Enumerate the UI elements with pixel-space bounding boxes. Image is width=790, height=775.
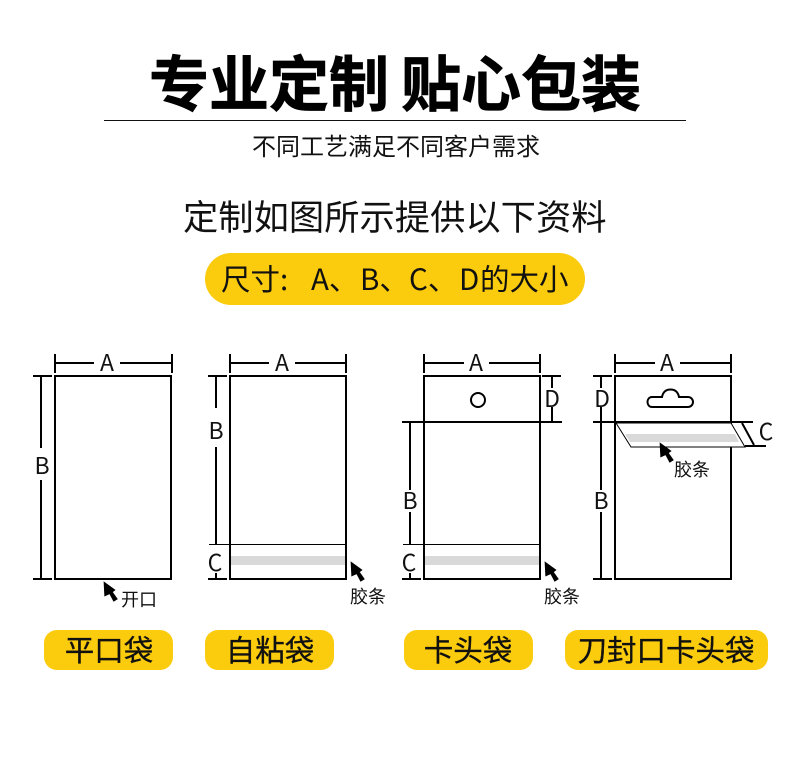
dimension B [33, 376, 52, 579]
dimension A: A [100, 344, 114, 378]
dimension B: B [208, 412, 224, 446]
dimension A [424, 344, 540, 378]
dimension A [615, 344, 731, 378]
callout: sizes pill: C、 [409, 257, 457, 299]
title: 专业定制 [149, 37, 389, 124]
dimension B [208, 376, 227, 545]
arrow: opening [104, 582, 117, 601]
tag: header-card bag [404, 628, 533, 670]
header fold line [402, 421, 562, 423]
callout: sizes pill: B、 [360, 257, 409, 299]
dimension B: B [402, 482, 418, 516]
label: adhesive strip: 胶条 [350, 583, 386, 609]
tag: flat-mouth bag [44, 628, 173, 670]
tag: header-card bag: 卡头袋 [424, 628, 512, 670]
label: opening: 开口 [121, 586, 157, 612]
dimension D: D [544, 380, 560, 414]
tag: self-adhesive bag: 自粘袋 [226, 628, 314, 670]
hang hole [471, 393, 485, 407]
tag: flat-mouth bag: 平口袋 [65, 628, 153, 670]
title underline [104, 120, 686, 121]
dimension C: C [208, 544, 222, 578]
dimension B: B [593, 482, 609, 516]
panel: header-card bag diagram [402, 344, 580, 609]
panel: self-adhesive bag diagram [208, 344, 386, 609]
dimension D [542, 376, 561, 422]
panel: flat-mouth bag diagram [33, 344, 172, 612]
arrow: adhesive strip [545, 562, 558, 581]
dimension B: B [34, 447, 50, 481]
dimension A [230, 344, 346, 378]
callout: sizes pill [205, 253, 585, 305]
seal line [209, 544, 346, 546]
dimension A: A [469, 344, 483, 378]
dimension B [593, 422, 612, 579]
dimension D: D [594, 380, 610, 414]
tag: knife-seal header-card bag: 刀封口卡头袋 [577, 628, 755, 670]
seal line [403, 544, 540, 546]
adhesive strip [625, 434, 739, 442]
adhesive strip [231, 556, 345, 565]
bag outline [424, 376, 540, 579]
callout: sizes pill: 尺寸: [221, 257, 288, 299]
arrow: adhesive strip [660, 443, 673, 462]
callout: sizes pill: 的大小 [480, 257, 569, 299]
header fold line [593, 421, 753, 423]
dimension C [742, 413, 773, 447]
euro hang slot [648, 390, 693, 407]
label: adhesive strip: 胶条 [674, 456, 710, 482]
heading: required information: 定制如图所示提供以下资料 [183, 190, 607, 241]
bag outline [55, 376, 171, 579]
dimension A [55, 344, 172, 378]
callout: sizes pill: D [459, 257, 479, 299]
adhesive strip [425, 556, 539, 565]
dimension C: C [402, 544, 416, 578]
panel: knife-seal header-card bag diagram [593, 344, 773, 579]
bag outline [615, 376, 731, 579]
callout: sizes pill: A、 [311, 257, 358, 299]
tag: self-adhesive bag [205, 628, 334, 670]
bag outline [230, 376, 346, 579]
arrow: adhesive strip [351, 562, 364, 581]
subtitle: 不同工艺满足不同客户需求 [252, 127, 540, 162]
dimension A: A [275, 344, 289, 378]
dimension C: C [759, 413, 773, 447]
dimension B [402, 422, 418, 545]
label: adhesive strip: 胶条 [544, 583, 580, 609]
title: 贴心包装 [401, 37, 641, 124]
dimension D [593, 376, 612, 422]
dimension A: A [660, 344, 674, 378]
folded flap [616, 423, 745, 447]
